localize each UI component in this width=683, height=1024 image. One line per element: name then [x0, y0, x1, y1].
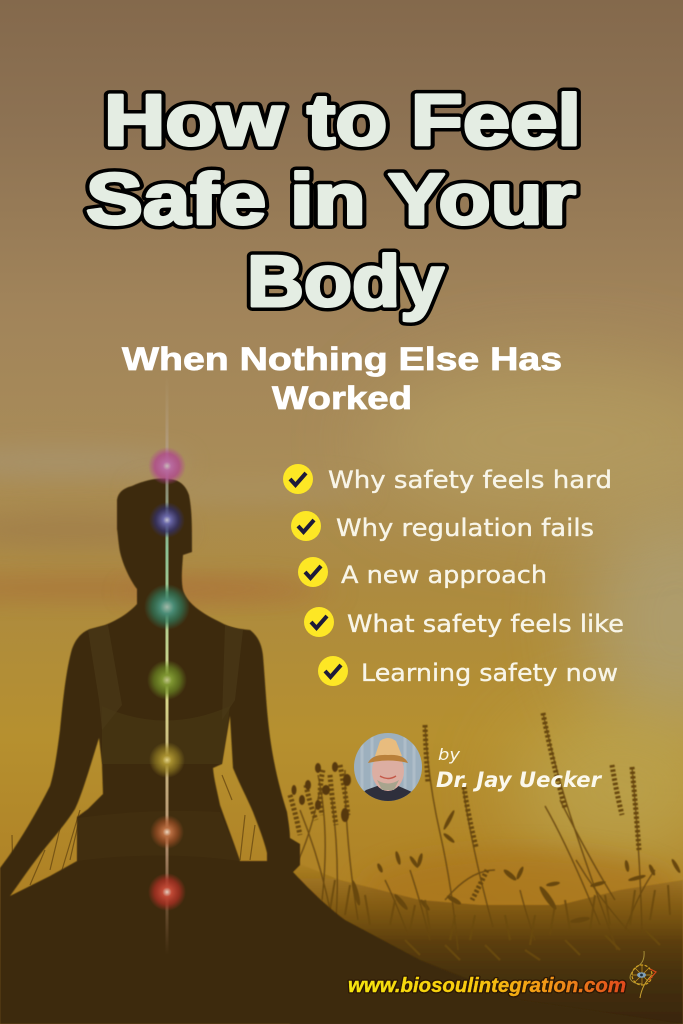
title: How to Feel — [104, 81, 581, 161]
item: what safety feels like: What safety feels like — [347, 610, 624, 638]
clothing: top straps and band — [77, 625, 243, 861]
subtitle: Worked — [272, 380, 412, 416]
title: How to Feel — [104, 81, 581, 161]
item: a new approach: A new approach — [341, 561, 547, 589]
logo: eye emblem — [630, 951, 656, 998]
dense brush near ground — [330, 880, 670, 960]
tall grass stems — [285, 713, 655, 950]
chakra: third eye — [149, 502, 185, 538]
chakra: heart — [147, 660, 187, 700]
website url: www.biosoulintegration.com — [348, 975, 626, 997]
chakra: throat — [144, 584, 190, 630]
title: Safe in Your — [86, 160, 576, 240]
checklist — [283, 464, 624, 687]
item: why regulation fails: Why regulation fails — [336, 514, 594, 542]
byline — [436, 745, 603, 792]
website url: www.biosoulintegration.com — [348, 975, 626, 997]
title: Body — [247, 242, 444, 322]
chakra energy line and glows — [144, 375, 190, 955]
grass field silhouette — [285, 713, 683, 1024]
subtitle — [122, 341, 562, 416]
title: Body — [247, 242, 444, 322]
leaves — [350, 809, 682, 924]
chakra: root — [148, 873, 186, 911]
item: why safety feels hard: Why safety feels hard — [328, 466, 612, 494]
subtitle: When Nothing Else Has — [122, 341, 562, 377]
chakra: crown — [148, 447, 186, 485]
byline: by — [438, 745, 461, 764]
chakra: sacral — [150, 815, 184, 849]
author photo — [354, 733, 422, 801]
grass behind figure, left side — [12, 775, 255, 885]
byline: Dr. Jay Uecker — [436, 768, 603, 792]
item: learning safety now: Learning safety now — [361, 659, 618, 687]
seed clusters on the bush beside the hand — [292, 762, 351, 822]
meditating woman silhouette — [0, 478, 683, 1024]
chakra: solar plexus — [149, 742, 185, 778]
item: a new approach — [298, 557, 547, 589]
seed heads — [290, 713, 639, 900]
title: Safe in Your — [86, 160, 576, 240]
title — [86, 81, 581, 322]
